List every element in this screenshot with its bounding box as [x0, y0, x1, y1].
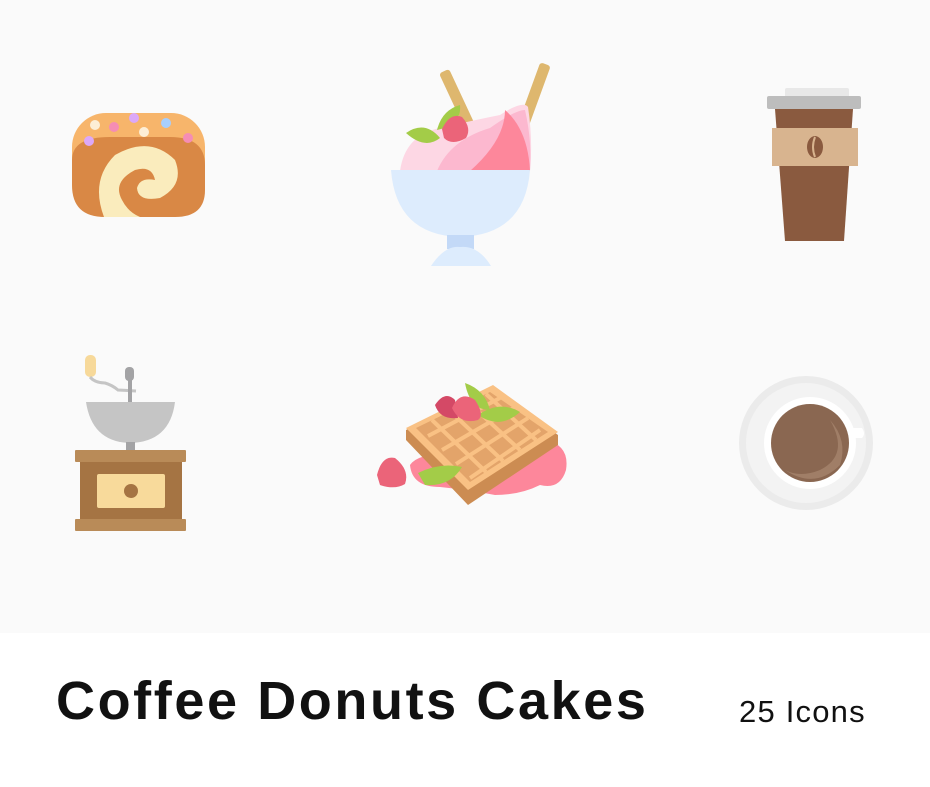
- icon count: 25 Icons: [739, 694, 866, 729]
- icon: takeaway coffee cup: [767, 88, 861, 241]
- icon: coffee grinder: [75, 355, 186, 531]
- icon: coffee cup top view: [739, 376, 873, 510]
- title: Coffee Donuts Cakes: [56, 671, 649, 731]
- icon: waffle with strawberries: [377, 383, 567, 505]
- icon: ice cream sundae: [391, 62, 551, 266]
- icon: swiss roll: [72, 113, 205, 217]
